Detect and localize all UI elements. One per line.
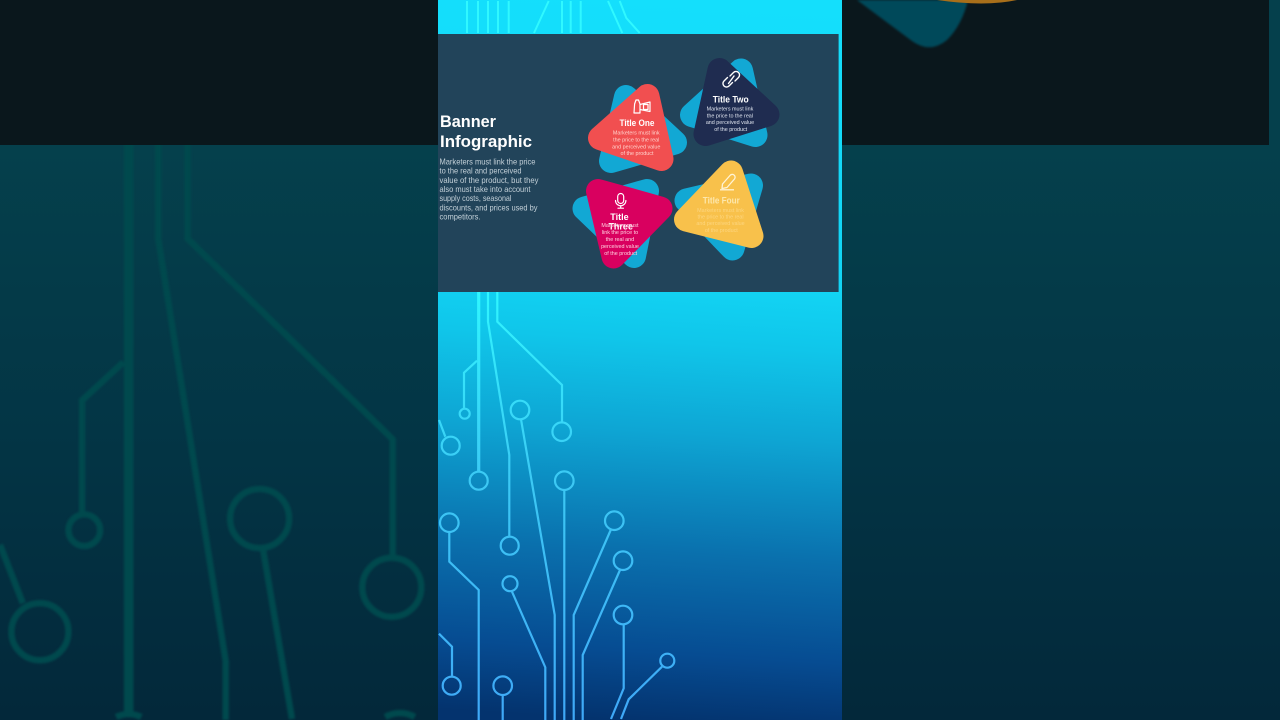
text: title one body: Marketers must link xyxy=(613,130,660,136)
center column: gradient background xyxy=(438,0,842,720)
background dark panel xyxy=(0,0,1269,145)
label: title four: Title Four xyxy=(703,196,740,206)
text: title three body: of the product xyxy=(604,251,638,257)
circuit traces at top of the column xyxy=(467,1,640,33)
text: title two body: the price to the real xyxy=(707,113,753,119)
background circuit traces xyxy=(0,140,421,720)
label: title three: Title xyxy=(610,212,629,222)
card: title two xyxy=(692,70,768,135)
text: title two body: of the product xyxy=(714,127,748,133)
icon: chain link xyxy=(723,71,740,87)
heading: Banner xyxy=(440,112,496,131)
background orange triangle tip xyxy=(937,0,1017,4)
text: title one body: of the product xyxy=(621,151,654,157)
description text: also must take into account xyxy=(440,184,531,194)
panel: banner infographic xyxy=(438,34,839,292)
label: title one: Title One xyxy=(620,118,654,128)
text: title four body: of the product xyxy=(705,228,738,234)
description text: value of the product, but they xyxy=(440,175,539,185)
text: title three body: perceived value xyxy=(601,244,639,250)
heading: Infographic xyxy=(440,132,532,151)
text: title three body: link the price to xyxy=(602,230,638,236)
label: title three: Three xyxy=(608,222,633,232)
card: title four xyxy=(686,172,752,248)
description text: Marketers must link the price xyxy=(440,156,536,166)
text: title four body: the price to the real xyxy=(697,214,744,220)
description text: to the real and perceived xyxy=(440,166,522,176)
text: title three body: Marketers must xyxy=(601,223,639,229)
background teal triangle tip xyxy=(857,0,968,47)
circuit traces below the panel xyxy=(439,290,674,720)
description text: supply costs, seasonal xyxy=(440,193,512,203)
label: title two: Title Two xyxy=(713,94,749,104)
icon: pencil xyxy=(720,174,735,190)
card: title three xyxy=(584,191,660,257)
icon: microphone xyxy=(616,194,626,208)
text: title two body: and perceived value xyxy=(706,120,754,126)
description text: competitors. xyxy=(440,212,480,222)
text: title one body: the price to the real xyxy=(613,138,659,144)
icon: megaphone xyxy=(634,100,650,113)
description text: discounts, and prices used by xyxy=(440,202,538,212)
card: title one xyxy=(600,96,675,161)
text: title two body: Marketers must link xyxy=(707,106,754,112)
text: title three body: the real and xyxy=(606,237,634,243)
text: title four body: and perceived value xyxy=(696,221,745,227)
text: title four body: Marketers must link xyxy=(697,208,744,214)
text: title one body: and perceived value xyxy=(612,144,660,150)
